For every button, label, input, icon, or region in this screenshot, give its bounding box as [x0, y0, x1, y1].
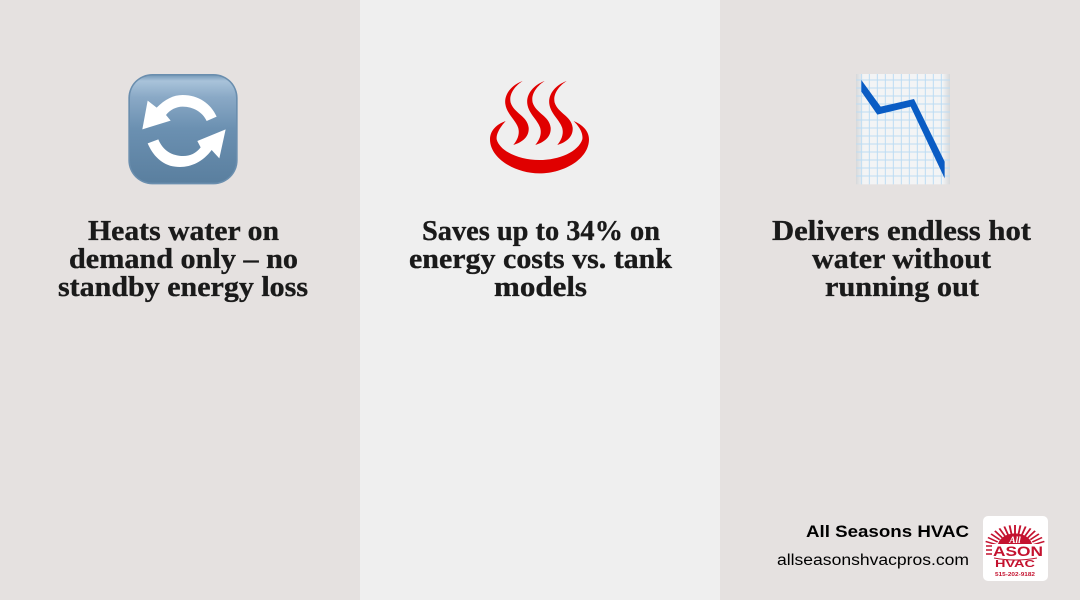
brand name: All Seasons HVAC: [806, 522, 969, 541]
heading: endless hot water: running out: [825, 271, 979, 303]
website: allseasonshvacpros.com: [777, 552, 969, 569]
heading: saves on energy costs: Saves up to 34% on: [422, 215, 660, 247]
heading: heats water on demand: demand only – no: [69, 243, 298, 275]
heading: endless hot water: [772, 215, 1031, 303]
logo: All Seasons HVAC: ASON: [993, 544, 1043, 559]
logo: All Seasons HVAC: HVAC: [995, 559, 1035, 570]
icon: hot springs: [490, 81, 589, 173]
logo: All Seasons HVAC: All: [1008, 536, 1021, 546]
heading: saves on energy costs: [409, 215, 673, 303]
heading: heats water on demand: standby energy loss: [58, 271, 308, 303]
logo: All Seasons HVAC: [983, 516, 1048, 581]
heading: saves on energy costs: energy costs vs. tank: [409, 243, 673, 275]
panel: on-demand heating: [0, 0, 360, 600]
heading: heats water on demand: Heats water on: [88, 215, 279, 247]
panel: energy savings: [360, 0, 720, 600]
icon: falling chart: [856, 74, 950, 184]
icon: refresh arrows: [128, 74, 238, 184]
heading: endless hot water: water without: [812, 243, 991, 275]
heading: heats water on demand: [58, 215, 308, 303]
logo: All Seasons HVAC: 515-202-9182: [995, 572, 1035, 578]
heading: endless hot water: Delivers endless hot: [772, 215, 1031, 247]
heading: saves on energy costs: models: [494, 271, 587, 303]
panel: endless hot water: [720, 0, 1080, 600]
